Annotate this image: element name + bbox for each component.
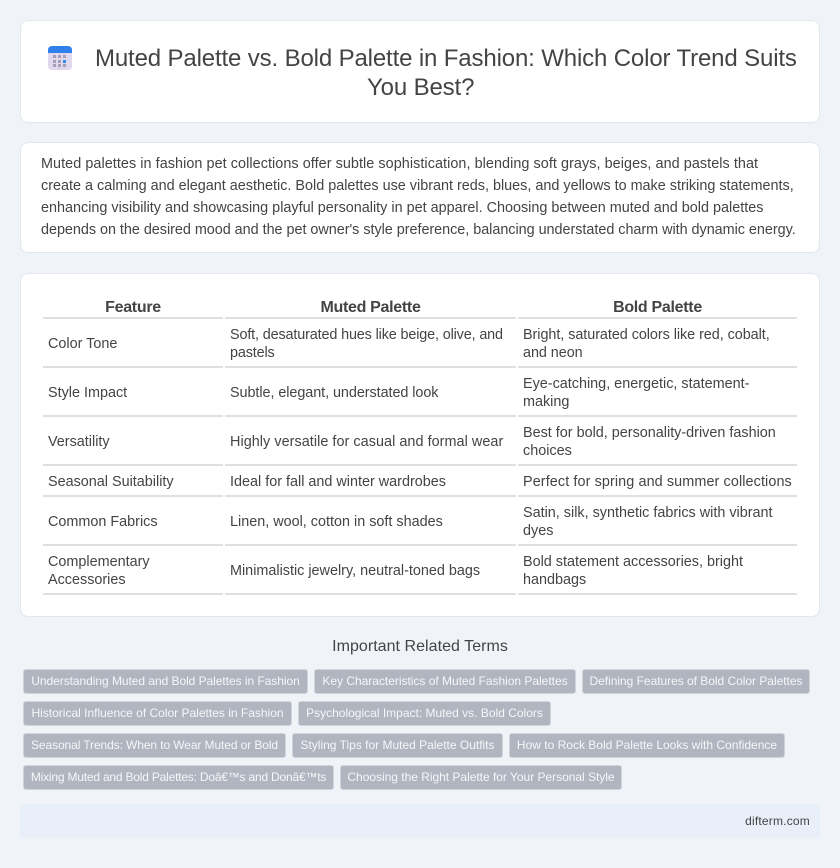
table content: dyes — [523, 523, 553, 539]
tag list: How to Rock Bold Palette Looks with Confidence — [517, 738, 777, 752]
row: Complementary Accessories: Complementary — [48, 554, 150, 570]
table content: Ideal for fall and winter wardrobes — [230, 474, 446, 490]
footer bar — [20, 804, 820, 838]
column header: Feature: Feature — [105, 299, 161, 316]
table content: Perfect for spring and summer collections — [523, 474, 792, 490]
tag list: Understanding Muted and Bold Palettes in Fashion — [31, 674, 300, 688]
panel: description — [20, 142, 820, 253]
column header: Muted Palette: Muted Palette — [320, 299, 421, 316]
row: Common Fabrics: Common Fabrics — [48, 514, 158, 530]
table content: Bright, saturated colors like red, cobalt, — [523, 327, 770, 343]
description text — [41, 156, 796, 238]
table content: Bold statement accessories, bright — [523, 554, 743, 570]
row: Color Tone: Color Tone — [48, 336, 117, 352]
table content: Satin, silk, synthetic fabrics with vibrant — [523, 505, 773, 521]
panel: header — [20, 20, 820, 123]
tag list — [23, 669, 810, 790]
table content: making — [523, 394, 569, 410]
table content: pastels — [230, 345, 275, 361]
tag list: Key Characteristics of Muted Fashion Palettes — [322, 674, 568, 688]
tag list: Defining Features of Bold Color Palettes — [590, 674, 802, 688]
table content: Soft, desaturated hues like beige, olive, and — [230, 327, 503, 343]
title — [95, 45, 797, 101]
row: Versatility: Versatility — [48, 434, 110, 450]
heading: Important Related Terms: Important Related Terms — [332, 638, 508, 655]
table content: handbags — [523, 572, 586, 588]
table content: Linen, wool, cotton in soft shades — [230, 514, 443, 530]
column header: Bold Palette: Bold Palette — [613, 299, 702, 316]
row: Seasonal Suitability: Seasonal Suitability — [48, 474, 174, 490]
description text: depends on the desired mood and the pet owner's style preference, balancing understated charm with dynamic energy. — [41, 222, 796, 238]
footer site name: difterm.com — [745, 814, 810, 828]
table content: choices — [523, 443, 572, 459]
tag list: Mixing Muted and Bold Palettes: Doâ€™s and Donâ€™ts — [31, 770, 326, 784]
table content: Minimalistic jewelry, neutral-toned bags — [230, 563, 480, 579]
panel: comparison table — [20, 273, 820, 617]
title: You Best? — [367, 74, 474, 101]
tag list: Psychological Impact: Muted vs. Bold Colors — [306, 706, 543, 720]
tag list: Seasonal Trends: When to Wear Muted or Bold — [31, 738, 278, 752]
description text: enhancing visibility and showcasing playful personality in pet apparel. Choosing between muted and bold palettes — [41, 200, 763, 216]
row: Complementary Accessories: Accessories — [48, 572, 126, 588]
row: Style Impact: Style Impact — [48, 385, 127, 401]
tag list: Styling Tips for Muted Palette Outfits — [300, 738, 495, 752]
icon: calendar — [48, 46, 72, 70]
tag list: Choosing the Right Palette for Your Personal Style — [347, 770, 615, 784]
table content: Eye-catching, energetic, statement- — [523, 376, 749, 392]
row: Complementary Accessories — [48, 554, 150, 588]
tag list: Historical Influence of Color Palettes in Fashion — [31, 706, 284, 720]
table content: Best for bold, personality-driven fashion — [523, 425, 776, 441]
table content: and neon — [523, 345, 583, 361]
title: Muted Palette vs. Bold Palette in Fashion: Which Color Trend Suits — [95, 45, 797, 72]
description text: create a calming and elegant aesthetic. Bold palettes use vibrant reds, blues, and yellows to make striking statements, — [41, 178, 794, 194]
table content: Highly versatile for casual and formal wear — [230, 434, 503, 450]
description text: Muted palettes in fashion pet collections offer subtle sophistication, blending soft grays, beiges, and pastels that — [41, 156, 758, 172]
table content: Subtle, elegant, understated look — [230, 385, 438, 401]
